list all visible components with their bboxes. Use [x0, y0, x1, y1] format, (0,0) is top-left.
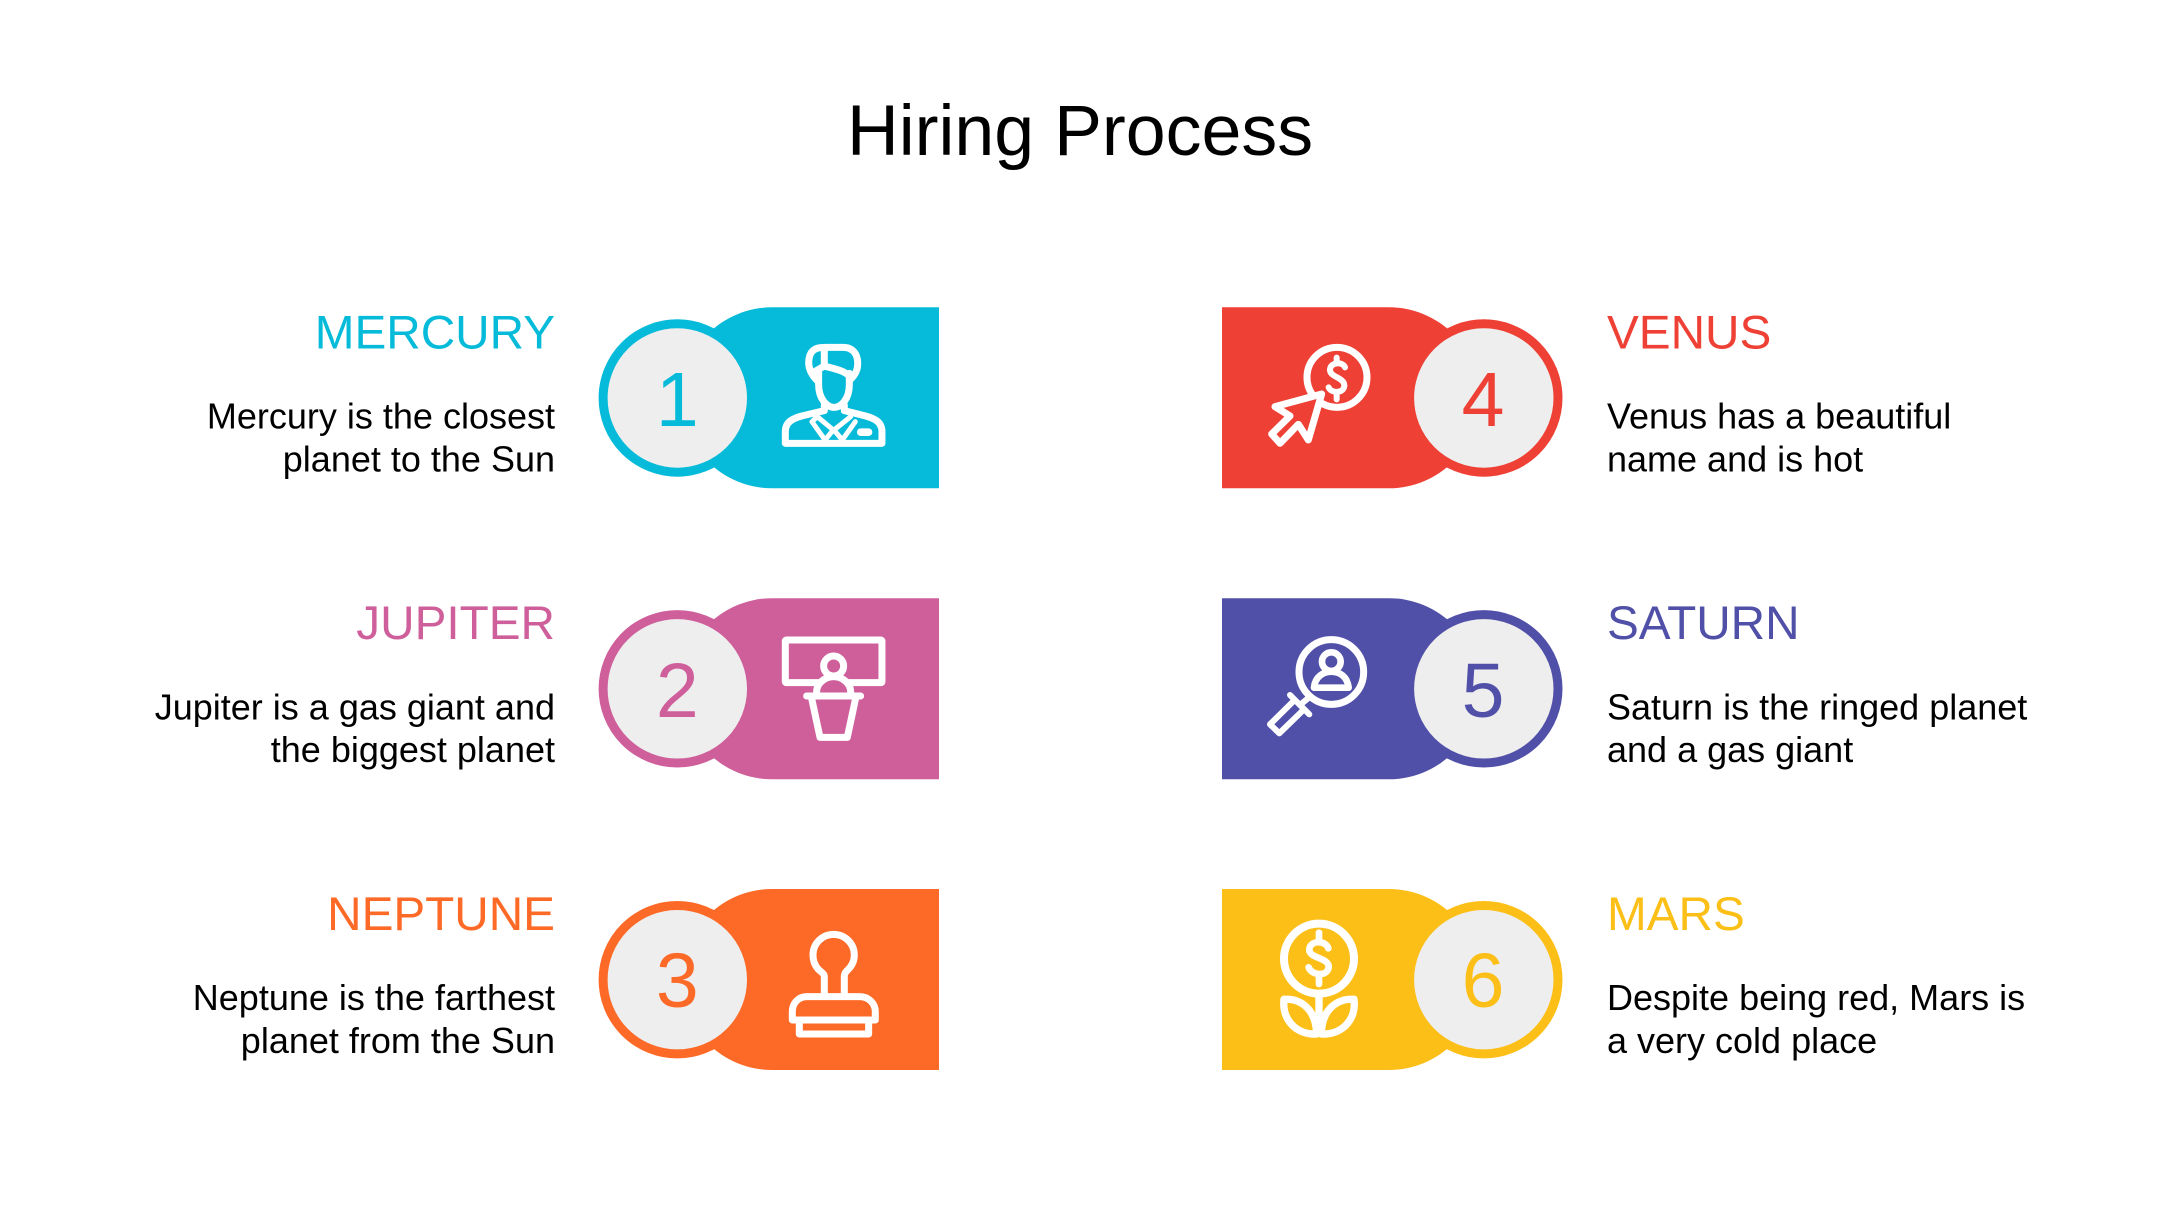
- icon: candidate search: [1270, 640, 1364, 733]
- heading: Mercury: MERCURY: [315, 306, 555, 359]
- heading: Venus: VENUS: [1607, 306, 1771, 359]
- text block: Venus description: Venus has a beautiful: [1607, 396, 1951, 436]
- text block: Saturn description: Saturn is the ringed planet: [1607, 686, 2027, 727]
- panel: step 6 Mars: [1222, 888, 2025, 1070]
- tab: Mercury: [682, 307, 939, 488]
- text block: Mars description: Despite being red, Mars is: [1607, 977, 2025, 1018]
- heading: Jupiter: JUPITER: [356, 597, 555, 650]
- tab: Mars: [1222, 889, 1480, 1070]
- icon: pay per click: [1272, 347, 1367, 443]
- text block: Neptune description: planet from the Sun: [241, 1020, 555, 1061]
- number badge 4: 4: [1462, 357, 1504, 443]
- panel: step 1 Mercury: [207, 306, 939, 488]
- tab: Saturn: [1222, 598, 1480, 779]
- title: Hiring Process: [847, 91, 1313, 171]
- heading: Saturn: SATURN: [1607, 597, 1800, 650]
- text block: Venus description: name and is hot: [1607, 438, 1863, 479]
- text block: Mercury description: Mercury is the closest: [207, 396, 555, 436]
- number badge 6: 6: [1462, 938, 1504, 1024]
- number badge 1: [603, 324, 752, 472]
- number badge 2: 2: [656, 648, 699, 734]
- number badge 5: [1410, 615, 1558, 763]
- text block: Mercury description: planet to the Sun: [283, 438, 555, 479]
- heading: Mars: MARS: [1607, 888, 1745, 941]
- text block: Jupiter description: the biggest planet: [271, 729, 555, 770]
- tab: Jupiter: [681, 598, 939, 779]
- panel: step 4 Venus: [1222, 306, 1951, 488]
- text block: Mars description: a very cold place: [1607, 1020, 1877, 1061]
- panel: step 5 Saturn: [1222, 597, 2027, 779]
- number badge 2: [603, 615, 752, 763]
- tab: Neptune: [682, 889, 939, 1070]
- text block: Neptune description: Neptune is the farthest: [193, 977, 555, 1018]
- panel: step 2 Jupiter: [155, 597, 939, 779]
- panel: step 3 Neptune: [193, 888, 939, 1070]
- number badge 3: [603, 906, 752, 1054]
- number badge 3: 3: [656, 938, 699, 1024]
- icon: money plant: [1284, 924, 1354, 1034]
- number badge 4: [1410, 324, 1558, 472]
- number badge 6: [1410, 906, 1558, 1054]
- text block: Saturn description: and a gas giant: [1607, 729, 1853, 770]
- icon: speaker at podium: [785, 640, 882, 737]
- tab: Venus: [1222, 307, 1480, 488]
- number badge 1: 1: [656, 357, 699, 443]
- heading: Neptune: NEPTUNE: [327, 888, 555, 941]
- icon: stamp: [792, 934, 875, 1034]
- icon: employee: [785, 347, 882, 443]
- text block: Jupiter description: Jupiter is a gas giant and: [155, 686, 555, 727]
- number badge 5: 5: [1462, 648, 1504, 734]
